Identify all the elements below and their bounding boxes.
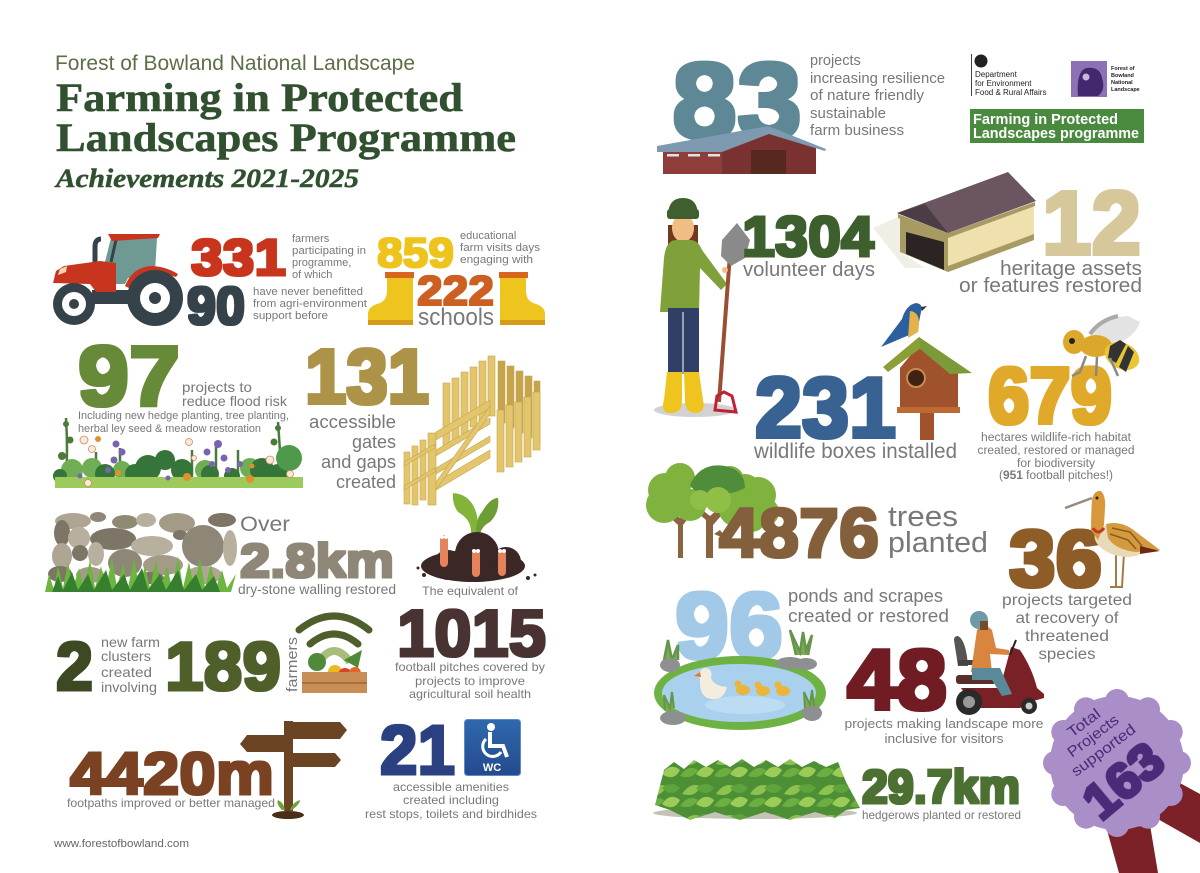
caption: reduce flood risk: reduce flood risk — [182, 393, 288, 409]
stat: soil health — [395, 493, 546, 701]
stat: footpaths — [67, 721, 347, 819]
illustration: barn — [657, 126, 826, 174]
caption: hectares habitat: created, restored or managed — [978, 445, 1134, 457]
caption: new farm clusters: involving — [101, 679, 157, 695]
caption: projects making landscape inclusive: inclusive for visitors — [884, 731, 1004, 746]
caption: hectares habitat — [978, 432, 1134, 482]
stat: inclusive landscape — [844, 611, 1044, 746]
caption: reduce flood risk — [182, 379, 288, 409]
caption: accessible amenities: created including — [403, 793, 499, 807]
caption: footpaths improved: footpaths improved or better managed — [67, 796, 275, 810]
number: 679: 679 — [988, 351, 1112, 440]
caption: accessible gates and gaps: gates — [352, 432, 396, 452]
stat: flood risk projects — [53, 329, 303, 488]
badge: programme name — [970, 109, 1144, 143]
caption: projects making landscape inclusive: projects making landscape more — [844, 716, 1044, 731]
caption: farmers participating: of which — [292, 269, 332, 281]
stat: resilience projects — [657, 40, 945, 174]
badge: programme name: Farming in Protected — [973, 112, 1118, 128]
logos block — [970, 54, 1144, 143]
number: 21: 21 — [380, 711, 455, 789]
caption: farmers participating: participating in — [292, 245, 366, 257]
number: 2.8km: 2.8km — [240, 534, 394, 587]
logo: Forest of Bowland owl — [1071, 61, 1140, 97]
number: 97: 97 — [78, 329, 180, 423]
organisation name: Forest of Bowland National Landscape — [55, 52, 415, 75]
label: total projects supported: supported — [1068, 721, 1139, 780]
number: 83: 83 — [672, 40, 802, 161]
number: 859: 859 — [377, 229, 454, 276]
caption: heritage assets: heritage assets — [1000, 258, 1142, 280]
caption: football pitches — [395, 660, 545, 701]
caption: educational visits — [460, 230, 541, 266]
logo: Forest of Bowland owl: Forest of — [1111, 66, 1135, 72]
number: 131: 131 — [305, 334, 429, 420]
stat: wildlife-rich habitat — [978, 316, 1144, 482]
stat: dry-stone walling — [45, 512, 396, 597]
caption: football pitches: projects to improve — [415, 674, 525, 688]
caption: volunteer days: volunteer days — [743, 259, 875, 281]
caption: accessible amenities: rest stops, toilets and birdhides — [365, 807, 537, 821]
caption: accessible gates and gaps: accessible — [309, 412, 396, 432]
caption: projects targeted — [1002, 592, 1132, 663]
caption: reduce flood risk: projects to — [182, 379, 252, 395]
icon: bird house — [883, 337, 972, 440]
caption: trees planted: trees — [888, 501, 958, 533]
label: schools: schools — [418, 304, 494, 331]
number: 4420m: 4420m — [70, 741, 274, 807]
caption: projects targeted: species — [1038, 646, 1096, 663]
caption: accessible gates and gaps: and gaps — [321, 452, 396, 472]
caption: new farm clusters — [101, 634, 160, 695]
number: 36: 36 — [1009, 514, 1102, 603]
caption: projects targeted: at recovery of — [1016, 610, 1119, 627]
caption: increasing resilience: farm business — [810, 123, 904, 139]
caption: trees planted: planted — [888, 527, 988, 559]
caption: hedgerows planted: hedgerows planted or restored — [862, 808, 1021, 822]
caption: increasing resilience — [810, 53, 945, 139]
caption: hectares habitat: (951 football pitches!) — [999, 470, 1113, 482]
icon: curlew — [1065, 491, 1160, 587]
stat: ponds and scrapes — [654, 573, 949, 730]
logo: Defra: for Environment — [975, 79, 1032, 88]
caption: ponds and scrapes — [788, 586, 949, 626]
caption: projects targeted: projects targeted — [1002, 592, 1132, 609]
caption: trees planted — [888, 501, 988, 559]
number: 163: 163 — [1072, 732, 1175, 830]
caption: farmers participating — [292, 233, 366, 281]
number: 29.7km: 29.7km — [862, 760, 1020, 813]
number: 12: 12 — [1042, 174, 1141, 274]
caption: wildlife boxes installed: wildlife boxes installed — [753, 440, 957, 463]
icon: accessible WC sign: WC — [483, 762, 501, 774]
caption: hectares habitat: hectares wildlife-rich habitat — [981, 432, 1132, 444]
number: 331: 331 — [191, 229, 286, 286]
icon: bee — [1063, 316, 1144, 376]
caption: accessible amenities: accessible amenities — [393, 780, 509, 794]
logo: Defra: Food & Rural Affairs — [975, 88, 1046, 97]
stat: farm clusters — [56, 616, 369, 705]
icon: mobility scooter rider — [954, 611, 1044, 715]
number: 1015: 1015 — [397, 596, 546, 670]
label: total projects supported: Projects — [1064, 712, 1122, 761]
caption: farmers participating: programme, — [292, 257, 351, 269]
stat: wildlife boxes — [753, 303, 972, 463]
main heading second line: Landscapes Programme — [56, 115, 516, 160]
logo: Forest of Bowland owl: Landscape — [1111, 87, 1140, 93]
caption: including planting: Including new hedge planting, tree planting, — [78, 410, 289, 422]
logo: Defra — [971, 54, 1046, 97]
caption: farmers participating: farmers — [292, 233, 330, 245]
number: 189: 189 — [165, 628, 281, 705]
caption: heritage assets: or features restored — [959, 275, 1142, 297]
illustration: soil mound with worms and sprout — [416, 493, 536, 582]
illustration: wooden gate and fence — [404, 356, 540, 505]
logo: Defra: Department — [975, 70, 1018, 79]
caption: including planting — [78, 410, 289, 435]
number: 222: 222 — [417, 267, 494, 314]
title block — [54, 52, 516, 193]
stat: volunteer days — [654, 198, 875, 417]
caption: educational visits: educational — [460, 230, 516, 242]
caption: increasing resilience: sustainable — [810, 106, 886, 122]
label: farmers vertical: farmers — [284, 637, 301, 692]
logo: Forest of Bowland owl: National — [1111, 80, 1133, 86]
caption: dry-stone walling restored: dry-stone walling restored — [238, 582, 396, 597]
caption: ponds and scrapes: ponds and scrapes — [788, 586, 943, 606]
stat: educational farm visits with boots — [368, 229, 545, 331]
label: the equivalent of: The equivalent of — [422, 584, 519, 598]
rosette seal — [1043, 689, 1191, 837]
caption: projects targeted: threatened — [1025, 628, 1109, 645]
website address: www.forestofbowland.com — [53, 838, 189, 850]
main heading: Farming in Protected — [56, 75, 463, 120]
label: Over: Over — [240, 513, 290, 536]
label: total projects supported — [1064, 705, 1139, 780]
subtitle: Achievements 2021-2025 — [54, 164, 359, 193]
caption: football pitches: football pitches covered by — [395, 660, 545, 674]
stat: threatened species — [1002, 491, 1160, 663]
number: 2: 2 — [56, 628, 93, 705]
icon: tractor — [53, 234, 183, 326]
label: total projects supported: Total — [1064, 705, 1104, 741]
caption: never benefitted: have never benefitted — [253, 286, 363, 298]
badge: programme name: Landscapes programme — [973, 126, 1139, 142]
stat: farmers with tractor — [53, 229, 367, 336]
illustration: wildflower meadow — [53, 418, 303, 488]
stat: accessible gates — [305, 334, 540, 505]
number: 4876: 4876 — [719, 494, 879, 572]
illustration: pond with duck and ducklings — [654, 630, 826, 730]
caption: hectares habitat: for biodiversity — [1017, 458, 1095, 470]
caption: increasing resilience: of nature friendly — [810, 88, 925, 104]
icon: accessible WC sign — [464, 720, 520, 776]
caption: educational visits: engaging with — [460, 254, 533, 266]
icon: signal arcs and vegetable crate — [299, 616, 369, 693]
award rosette: total projects — [1043, 689, 1200, 873]
icon: left wellington boot — [368, 272, 414, 325]
logo: Forest of Bowland owl: Bowland — [1111, 73, 1134, 79]
caption: never benefitted — [253, 286, 367, 322]
caption: new farm clusters: clusters — [101, 648, 151, 664]
illustration: heritage building — [873, 172, 1036, 272]
caption: increasing resilience: projects — [810, 53, 861, 69]
stat: accessible amenities — [365, 711, 537, 821]
ribbon tails — [1107, 782, 1200, 873]
caption: including planting: herbal ley seed & meadow restoration — [78, 423, 261, 435]
caption: new farm clusters: created — [101, 664, 152, 680]
stat: trees planted — [646, 463, 988, 572]
illustration: volunteer with spade — [654, 198, 750, 417]
caption: accessible gates and gaps — [309, 412, 396, 492]
number: 1304: 1304 — [742, 205, 874, 269]
icon: wooden signpost — [240, 721, 347, 819]
icon: right wellington boot — [499, 272, 545, 325]
caption: accessible gates and gaps: created — [336, 472, 396, 492]
caption: never benefitted: support before — [253, 310, 328, 322]
illustration: dry-stone wall with grass — [45, 512, 237, 592]
caption: heritage assets — [959, 258, 1142, 297]
illustration: hedgerow — [653, 759, 860, 820]
caption: never benefitted: from agri-environment — [253, 298, 367, 310]
caption: ponds and scrapes: created or restored — [788, 606, 949, 626]
caption: educational visits: farm visits days — [460, 242, 541, 254]
caption: accessible amenities — [365, 780, 537, 821]
stat: heritage assets — [873, 172, 1142, 297]
number: 96: 96 — [675, 573, 783, 678]
stat: hedgerows — [653, 759, 1021, 822]
caption: new farm clusters: new farm — [101, 634, 160, 650]
caption: projects making landscape inclusive — [844, 716, 1044, 746]
icon: blue bird — [881, 303, 927, 347]
caption: increasing resilience: increasing resilience — [810, 71, 945, 87]
number: 48: 48 — [847, 633, 947, 728]
number: 90: 90 — [187, 277, 245, 336]
caption: football pitches: agricultural soil health — [409, 687, 531, 701]
illustration: trees — [646, 463, 779, 558]
number: 231: 231 — [755, 361, 896, 456]
